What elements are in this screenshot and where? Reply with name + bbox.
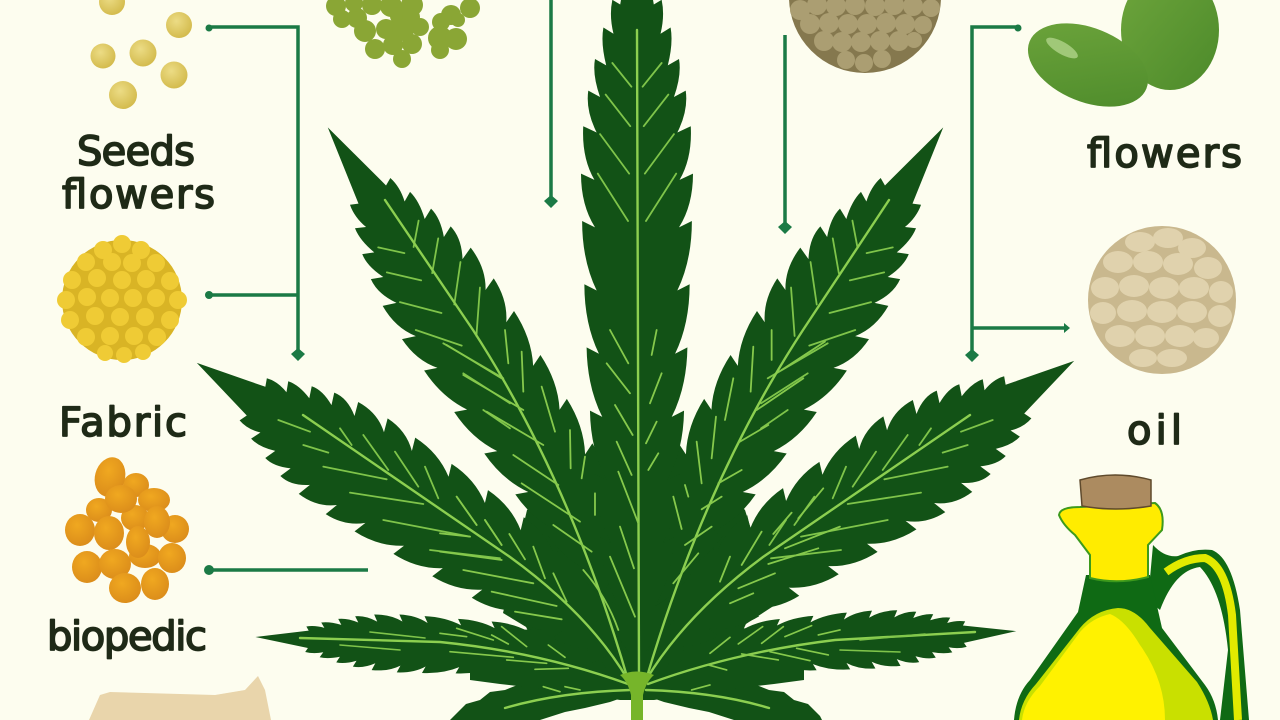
arrow heads (204, 24, 1070, 575)
icon: green pods (1016, 0, 1219, 123)
icon: fibre paper (89, 676, 271, 720)
leaf: upper right (544, 97, 989, 691)
leaf: upper left (282, 97, 727, 691)
label: flowers (left): flowers (62, 172, 215, 218)
bottom side veins (440, 626, 840, 692)
stem (620, 672, 654, 720)
leaf: bottom right (595, 602, 1018, 685)
label: oil: oil (1127, 408, 1182, 454)
icon: brown seed ball (789, 0, 941, 73)
cork (1080, 475, 1151, 509)
icon: pale seed ball (1088, 226, 1236, 374)
leaf: centre (581, 0, 693, 695)
leaf: lowest left (450, 680, 630, 720)
label: Fabric: Fabric (59, 400, 187, 446)
label: flowers (right): flowers (1087, 131, 1242, 177)
icon: orange seed cluster (65, 454, 189, 603)
central hemp leaf illustration (166, 0, 1105, 720)
label: biopedic: biopedic (47, 614, 207, 660)
right branch (972, 326, 1066, 330)
icon: loose seeds (90, 0, 192, 109)
leaf base fill (470, 628, 804, 700)
leaf: bottom left (254, 608, 676, 685)
connector lines and arrows (204, 0, 1070, 575)
bottle neck and lip (1059, 503, 1163, 581)
bottle handle (1148, 545, 1249, 720)
centre right arrow line (783, 35, 787, 227)
icon: yellow seed ball (57, 235, 187, 363)
bottle body (1014, 575, 1218, 720)
leaf: lower right (573, 313, 1105, 713)
outer side veins (278, 63, 993, 558)
right bracket (972, 27, 1020, 354)
left bracket (209, 27, 298, 354)
lower left connector (208, 568, 368, 572)
centre left arrow line (549, 0, 553, 202)
leaf centre fill (503, 447, 775, 690)
icon: oil bottle (1014, 475, 1249, 720)
label: Seeds: Seeds (77, 129, 195, 175)
inner side veins (440, 330, 840, 630)
left branch (208, 293, 298, 297)
outer bottom veins (340, 632, 925, 652)
midribs (300, 30, 975, 708)
leaf: lowest right (644, 680, 822, 720)
icon: green hop cluster (326, 0, 480, 68)
leaf: lower left (166, 315, 698, 715)
